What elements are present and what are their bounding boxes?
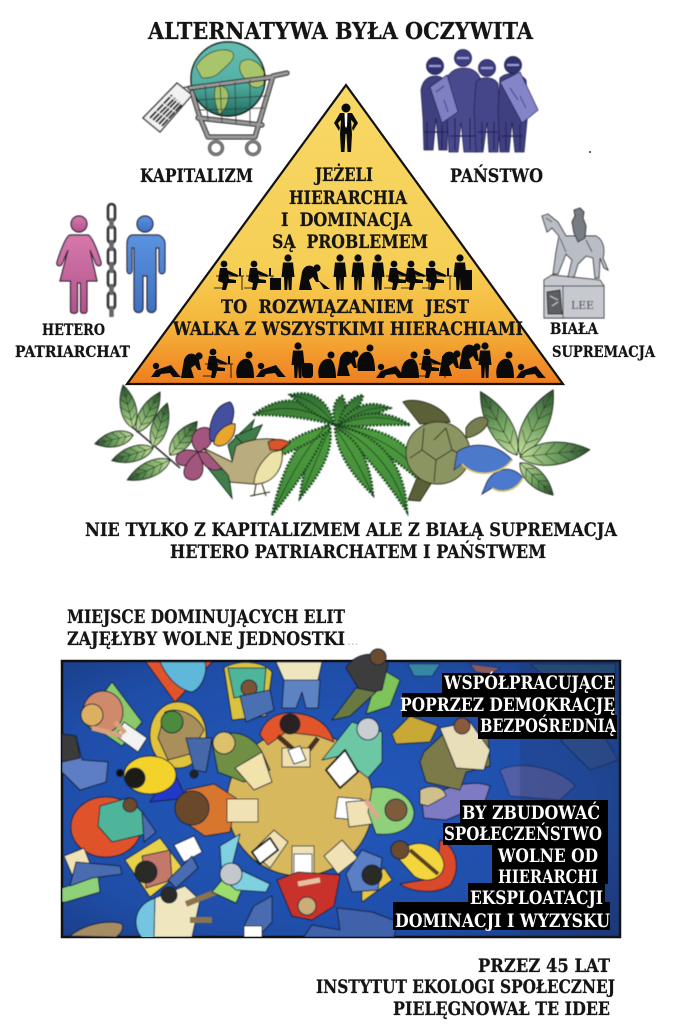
- text: 45 years footer: PIELĘGNOWAŁ TE IDEE: [393, 998, 610, 1020]
- text: hierarchy statement: HIERARCHIA: [289, 187, 407, 209]
- text: solution: WALKA Z WSZYSTKIMI HIERACHIAMI: [172, 318, 523, 340]
- figure: orange red: [260, 713, 334, 756]
- figure: grey hair light blue: [212, 834, 270, 903]
- right leaves: [471, 385, 591, 501]
- text: hierarchy statement: SĄ PROBLEMEM: [272, 231, 428, 253]
- butterfly: [210, 402, 235, 446]
- horse and rider: [542, 208, 608, 278]
- paper left: [227, 799, 258, 822]
- label: cooperating: WSPÓŁPRACUJĄCE: [443, 671, 615, 694]
- label: to build society: HIERARCHI: [498, 866, 598, 888]
- fern: [253, 393, 427, 515]
- text: free individuals: MIEJSCE DOMINUJĄCYCH ELIT: [67, 606, 345, 628]
- title: ALTERNATYWA BYŁA OCZYWITA: [147, 18, 534, 45]
- speck: [589, 151, 591, 153]
- figure: yellow seat near label: [392, 716, 438, 744]
- text: 45 years footer: PRZEZ 45 LAT: [478, 955, 610, 977]
- label: to build society: WOLNE OD: [497, 845, 598, 867]
- icon: woman, chain and man: [57, 204, 165, 317]
- icon: riot police: [421, 50, 538, 152]
- text: free individuals: [67, 606, 358, 650]
- figure: jeans bottom: [244, 896, 272, 937]
- figure: paper at top of table: [282, 748, 310, 767]
- chain: [108, 204, 115, 317]
- figure: beanbag teal: [71, 797, 156, 857]
- label: hetero patriarchat: HETERO: [42, 320, 105, 339]
- label: to build society: EKSPLOATACJI: [470, 887, 603, 909]
- figure: cream shirt top: [276, 662, 322, 708]
- text: free individuals: ZAJĘŁYBY WOLNE JEDNOSTKI: [67, 628, 345, 650]
- left leaves: [93, 383, 203, 487]
- text: not only capitalism: [85, 519, 617, 563]
- figure: red shirt: [277, 872, 340, 920]
- label: biala supremacja: BIAŁA: [550, 319, 599, 338]
- woman: [57, 216, 101, 313]
- figure: bottom tan: [70, 922, 123, 937]
- text: not only capitalism: HETERO PATRIARCHATEM I PAŃSTWEM: [170, 540, 546, 563]
- figure: light blue top: [146, 662, 212, 702]
- fish: [454, 445, 523, 494]
- text: 45 years footer: [316, 955, 615, 1020]
- flower leaves: [208, 420, 262, 498]
- pyramid: [127, 85, 563, 384]
- figure: cream top right: [420, 718, 490, 790]
- label: hetero patriarchat: PATRIARCHAT: [15, 342, 130, 361]
- figure: teal shirt: [224, 662, 274, 722]
- label: biala supremacja: [550, 319, 656, 361]
- figure: blue bottom: [304, 908, 398, 937]
- table: [227, 730, 373, 876]
- figure: teal grey hair: [322, 718, 382, 788]
- figure: green hair: [150, 702, 212, 778]
- clipboard: [292, 846, 314, 880]
- figure: faded right: [408, 664, 618, 800]
- bird: [203, 439, 290, 496]
- figure: left edge: [62, 734, 108, 790]
- label: to build society: BY ZBUDOWAĆ: [462, 801, 600, 824]
- label: panstwo: PAŃSTWO: [450, 164, 543, 187]
- man: [127, 216, 165, 312]
- figure: blond salmon: [81, 682, 147, 752]
- text: hierarchy statement: JEŻELI: [313, 163, 373, 186]
- cart: [190, 73, 287, 154]
- pedestal: LEE: [571, 299, 594, 312]
- label: hetero patriarchat: [15, 320, 130, 361]
- label: kapitalizm: KAPITALIZM: [140, 165, 253, 187]
- figure: light green right: [366, 787, 414, 834]
- text: free individuals: ...: [347, 634, 358, 648]
- figure: dark hair pink: [125, 836, 202, 897]
- label: cooperating: BEZPOŚREDNIĄ: [480, 714, 616, 737]
- pyramid shape: [127, 85, 563, 384]
- icon: globe in shopping cart: [143, 42, 287, 154]
- flower: [176, 428, 223, 480]
- icon: statue on pedestal: [542, 208, 608, 318]
- label: to build society: [393, 800, 610, 932]
- price tag: [143, 83, 192, 132]
- text: solution: TO ROZWIĄZANIEM JEST: [221, 296, 469, 318]
- text: solution: [172, 296, 523, 340]
- figure: dark seated, overlapping the top edge: [332, 649, 400, 720]
- nature band: plants and animals: [93, 383, 591, 515]
- floor: [62, 661, 620, 937]
- paper diagonal: [324, 840, 358, 874]
- figure: yellow with red chair: [391, 840, 456, 891]
- panel: assembly illustration: [62, 649, 620, 946]
- label: cooperating: [400, 671, 617, 739]
- figure: white sheet: [288, 746, 306, 764]
- people around table: [62, 661, 620, 946]
- figure: orange brown: [175, 784, 236, 836]
- text: hierarchy statement: [272, 163, 428, 253]
- figure: purple faded: [420, 783, 490, 820]
- shade right side: [520, 661, 620, 937]
- fern midribs: [253, 395, 427, 515]
- globe: [191, 42, 265, 116]
- label: to build society: DOMINACJI I WYZYSKU: [395, 910, 610, 932]
- figure: cream shirt bottom: [135, 885, 217, 937]
- label: to build society: SPOŁECZEŃSTWO: [444, 822, 602, 845]
- paper right: [335, 797, 372, 827]
- figure: blue seated right: [346, 850, 392, 902]
- figure: yellow: [116, 756, 186, 802]
- turtle: [403, 400, 488, 501]
- label: cooperating: POPRZEZ DEMOKRACJĘ: [400, 694, 615, 716]
- icon: businessman at top: [334, 104, 358, 152]
- figure: left bottom: [62, 848, 122, 902]
- label: biala supremacja: SUPREMACJA: [552, 342, 656, 361]
- silhouettes: oppressed row: [151, 342, 546, 378]
- figure: olive shirt: [212, 732, 272, 790]
- silhouettes: workers row: [214, 254, 472, 290]
- tablet: [252, 830, 288, 868]
- text: hierarchy statement: I DOMINACJA: [281, 209, 412, 231]
